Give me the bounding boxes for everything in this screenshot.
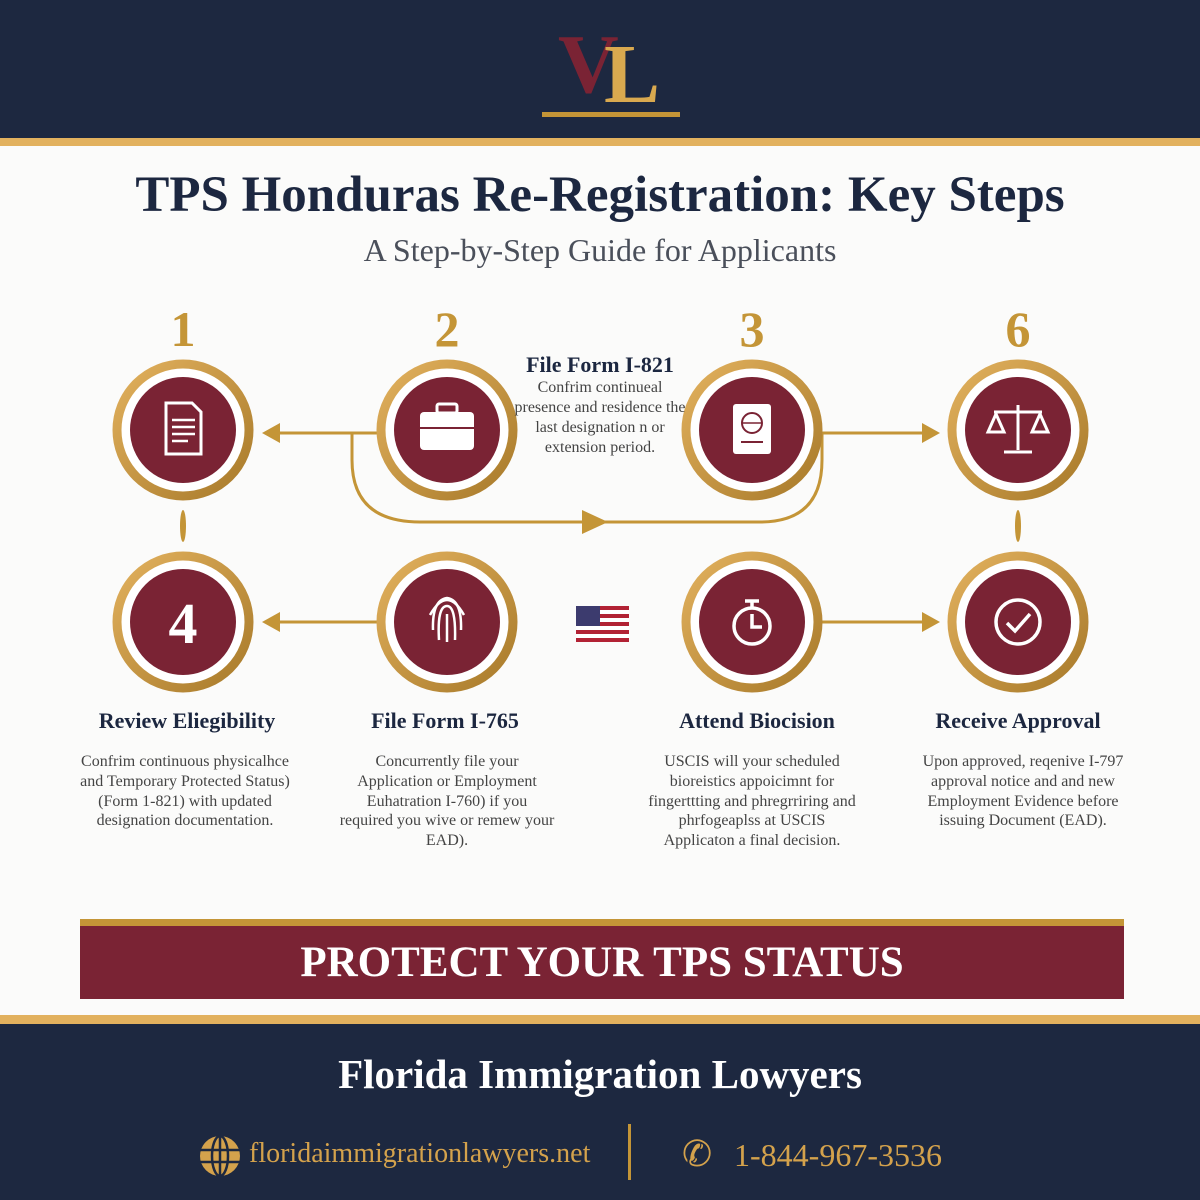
step descriptions: Confrim continuous physicalhce and Temporary Protected Status) (Form 1-821) with updated designation documentation. — [80, 753, 290, 829]
step numbers — [170, 301, 1030, 357]
step numbers: 6 — [1006, 301, 1030, 357]
icon circle: passport — [686, 364, 818, 496]
step descriptions: USCIS will your scheduled bioreistics appoicimnt for fingerttting and phregrriring and phrfogeaplss at USCIS Applicaton a final decision. — [648, 753, 856, 849]
step numbers: 2 — [434, 301, 460, 357]
phone: 1-844-967-3536 — [734, 1137, 942, 1173]
icon circle: briefcase — [381, 364, 513, 496]
logo: L — [604, 28, 660, 121]
website: floridaimmigrationlawyers.net — [249, 1138, 590, 1169]
step headings: Receive Approval — [935, 708, 1101, 733]
step numbers: 1 — [170, 301, 196, 357]
step headings — [99, 708, 1101, 733]
header band — [0, 0, 1200, 146]
footer firm name: Florida Immigration Lowyers — [338, 1051, 862, 1097]
icon circle: stopwatch — [686, 556, 818, 688]
step descriptions — [80, 753, 1123, 849]
icon circle: check — [952, 556, 1084, 688]
step headings: Review Eliegibility — [99, 708, 275, 733]
icon circle: document — [117, 364, 249, 496]
subtitle: A Step-by-Step Guide for Applicants — [364, 232, 836, 268]
banner — [80, 919, 1124, 999]
logo — [542, 18, 680, 121]
step headings: File Form I-765 — [371, 708, 519, 733]
step 2 text: Confrim continueal presence and residence the last designation n or extension period. — [514, 379, 686, 456]
icon circle: scales — [952, 364, 1084, 496]
icon circle: 4: 4 — [168, 591, 198, 656]
icon: US flag — [576, 606, 629, 642]
title: TPS Honduras Re-Registration: Key Steps — [135, 167, 1065, 223]
phone: ✆ — [682, 1134, 712, 1174]
banner: PROTECT YOUR TPS STATUS — [300, 939, 904, 986]
step 2 text: File Form I-821 — [526, 352, 674, 377]
step descriptions: Concurrently file your Application or Employment Euhatration I-760) if you required you wive or remew your EAD). — [340, 753, 554, 849]
icon circle: 4 — [117, 556, 249, 688]
step descriptions: Upon approved, reqenive I-797 approval notice and and new Employment Evidence before issuing Document (EAD). — [923, 753, 1123, 829]
footer — [0, 1015, 1200, 1200]
step headings: Attend Biocision — [679, 708, 835, 733]
step numbers: 3 — [740, 301, 764, 357]
website — [200, 1136, 590, 1176]
icon circle: fingerprint — [381, 556, 513, 688]
logo: V — [558, 18, 619, 111]
